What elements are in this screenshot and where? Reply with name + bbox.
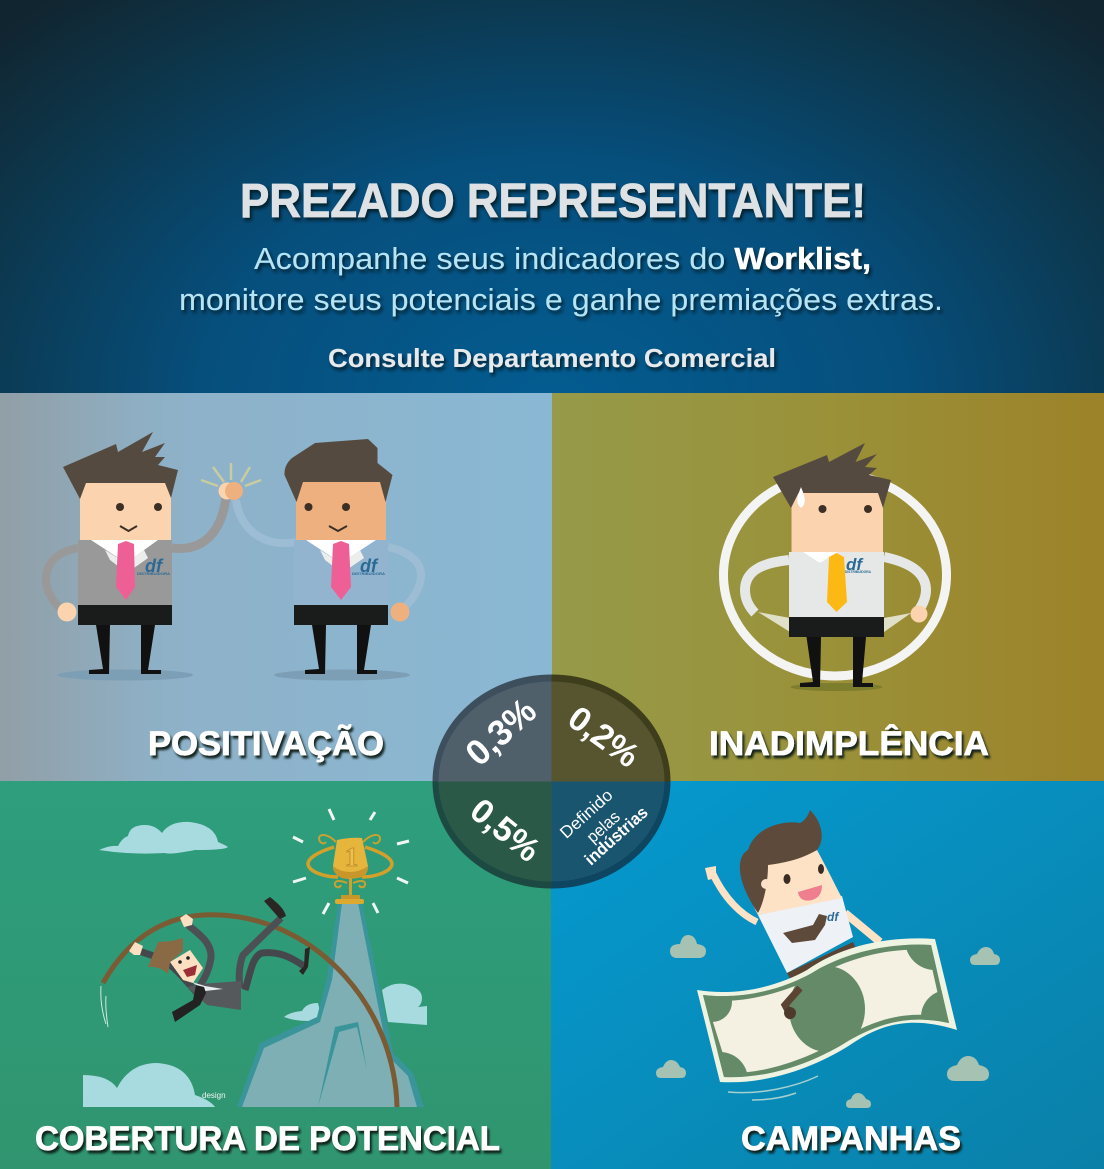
icon: first man high five — [46, 432, 226, 680]
icon: man with empty pockets — [724, 443, 946, 691]
icon: second man high five: df — [360, 556, 379, 576]
panel: positivação — [0, 393, 552, 781]
icon: cloud top left — [99, 822, 228, 854]
icon: first man high five: df — [145, 556, 164, 576]
value: campanhas definido pelas indústrias — [556, 785, 652, 869]
panel label: CAMPANHAS — [741, 1120, 961, 1158]
dial quadrant rings and fills — [432, 674, 671, 888]
icon: pole vaulting businessman — [101, 897, 397, 1107]
icon: first man high five: DISTRIBUIDORA — [137, 571, 170, 576]
icon: mountain — [237, 903, 424, 1107]
value: campanhas definido pelas indústrias: indústrias — [581, 803, 652, 869]
value: positivação 0,3%: 0,3% — [457, 690, 544, 774]
icon: man riding a banknote: df — [827, 910, 839, 924]
icon: banknote — [697, 938, 957, 1082]
value: inadimplência 0,2%: 0,2% — [561, 699, 646, 775]
watermark text: design — [202, 1091, 226, 1100]
title: PREZADO REPRESENTANTE! — [240, 175, 866, 228]
value: campanhas definido pelas indústrias: pelas — [583, 807, 624, 847]
icon: man with empty pockets: df — [846, 555, 864, 574]
value: cobertura 0,5%: 0,5% — [463, 791, 547, 870]
panel: inadimplência — [552, 393, 1104, 781]
panel label: COBERTURA DE POTENCIAL — [35, 1120, 500, 1158]
header text block — [179, 175, 943, 373]
icon: second man high five: DISTRIBUIDORA — [352, 571, 385, 576]
icon: second man high five — [236, 439, 421, 680]
icon: trophy with rays: 1 — [345, 842, 358, 872]
value: campanhas definido pelas indústrias: Definido — [556, 785, 616, 842]
panel: campanhas — [551, 781, 1104, 1169]
panel: cobertura de potencial — [0, 781, 551, 1169]
center percentage dial — [432, 674, 671, 888]
icon: man riding a banknote — [697, 810, 957, 1101]
icon: clouds behind mountain — [83, 984, 427, 1107]
panel label: POSITIVAÇÃO — [148, 725, 384, 763]
icon: man with empty pockets: DISTRIBUIDORA — [845, 569, 871, 574]
icon: clapping hands with sparks — [201, 463, 261, 500]
icon: small clouds — [656, 935, 1000, 1108]
panel label: INADIMPLÊNCIA — [709, 725, 989, 763]
subtitle line 2: monitore seus potenciais e ganhe premiações extras. — [179, 282, 943, 317]
header background panel — [0, 0, 1104, 393]
icon: trophy with rays — [293, 809, 409, 914]
subtitle line 1: Acompanhe seus indicadores do Worklist, — [254, 241, 871, 276]
contact note: Consulte Departamento Comercial — [328, 343, 776, 373]
